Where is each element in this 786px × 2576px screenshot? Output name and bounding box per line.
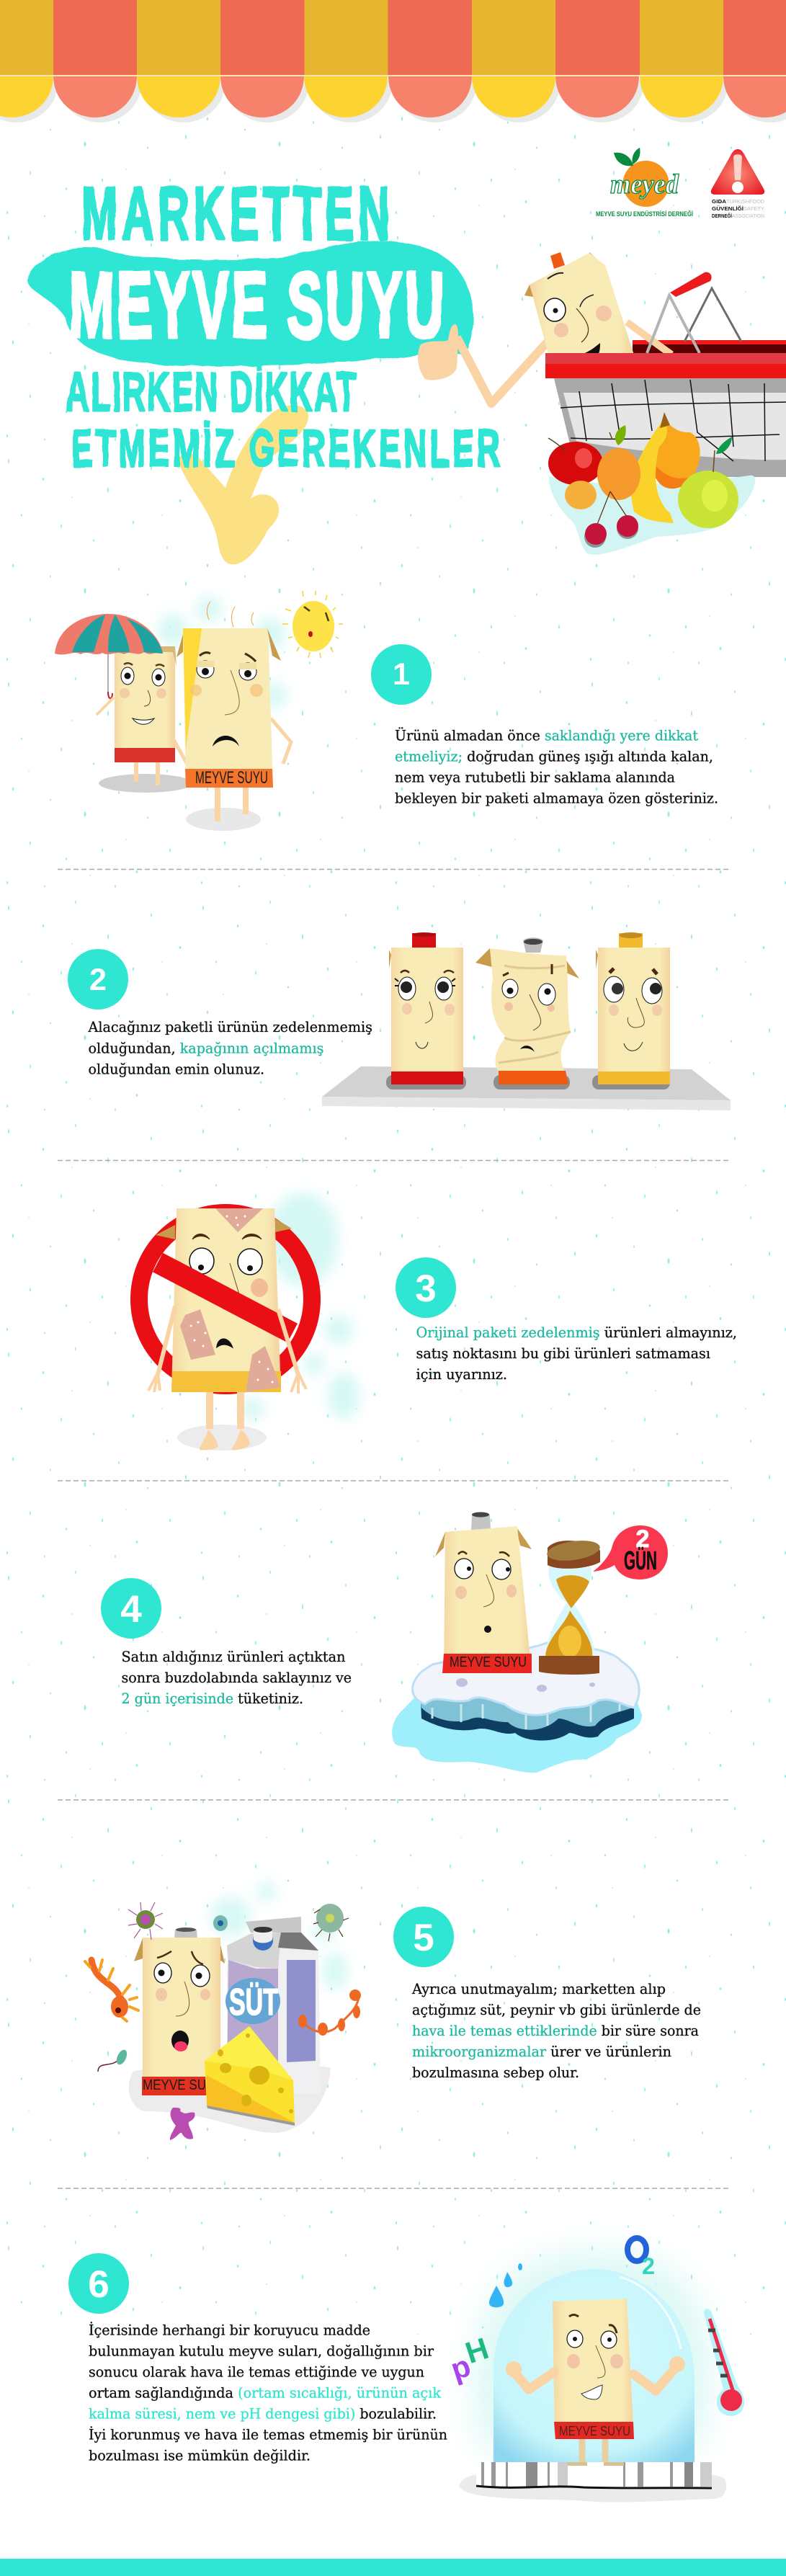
text block 6: İçerisinde herhangi bir koruyucu madde bbox=[89, 2322, 370, 2339]
illustration: damaged carton in prohibition sign bbox=[139, 1193, 359, 1450]
logo: meyed: meyed bbox=[610, 169, 679, 200]
prohibition ring bbox=[139, 1213, 312, 1386]
ice floe bbox=[412, 1643, 639, 1741]
text block 6 bbox=[89, 2322, 447, 2464]
text block 5: hava ile temas ettiklerinde bir süre sonra bbox=[412, 2022, 699, 2039]
number badge 2 bbox=[68, 949, 128, 1010]
logo: gıda güvenliği derneği: SAFETY bbox=[743, 205, 764, 212]
footer bar bbox=[0, 2559, 786, 2576]
icon: yellow check mark bbox=[178, 405, 308, 564]
text block 6: İyi korunmuş ve hava ile temas etmemiş bir ürünün bbox=[89, 2426, 447, 2443]
shelf bbox=[322, 1066, 731, 1110]
number badge 4: 4 bbox=[120, 1588, 142, 1631]
text block 2 bbox=[87, 1018, 372, 1078]
text block 4: sonra buzdolabında saklayınız ve bbox=[121, 1669, 352, 1686]
logo: gıda güvenliği derneği: DERNEĞİ bbox=[712, 213, 732, 219]
text block 1: nem veya rutubetli bir saklama alanında bbox=[395, 769, 675, 786]
awning bbox=[0, 0, 786, 122]
title: marketten: MARKETTEN bbox=[81, 172, 390, 256]
text block 6: sonucu olarak hava ile temas ettiğinde ve uygun bbox=[89, 2363, 424, 2381]
right carton bbox=[596, 932, 671, 1084]
flexing arms bbox=[506, 2356, 685, 2391]
number badge 5 bbox=[393, 1907, 454, 1967]
logo: meyed bbox=[596, 148, 693, 218]
text block 2: olduğundan emin olunuz. bbox=[88, 1061, 264, 1078]
speech bubble: 2 gün: 2 bbox=[636, 1525, 649, 1553]
puddle bbox=[392, 1693, 642, 1773]
text block 5 bbox=[411, 1980, 701, 2081]
text block 5: mikroorganizmalar ürer ve ürünlerin bbox=[412, 2043, 671, 2060]
logo: meyed: MEYVE SUYU ENDÜSTRİSİ DERNEĞİ bbox=[596, 210, 693, 218]
carton bbox=[435, 1512, 532, 1673]
carton: MEYVE SUYU bbox=[450, 1654, 527, 1670]
illustration: carton with thumb up and basket of fruit bbox=[418, 252, 786, 555]
text block 3: için uyarınız. bbox=[416, 1365, 507, 1383]
step 5 bbox=[85, 1881, 701, 2140]
step 2 bbox=[68, 932, 731, 1110]
text block 1: Ürünü almadan önce saklandığı yere dikkat bbox=[395, 726, 699, 744]
text block 1: etmeliyiz; doğrudan güneş ışığı altında kalan, bbox=[395, 748, 713, 765]
logo: gıda güvenliği derneği: GÜVENLİĞİ bbox=[712, 205, 743, 212]
text block 5: Ayrıca unutmayalım; marketten alıp bbox=[411, 1980, 666, 1997]
carton bbox=[553, 2299, 634, 2466]
ground shadow bbox=[129, 2063, 331, 2133]
crumpled middle carton bbox=[475, 937, 579, 1084]
text block 6: bulunmayan kutulu meyve suları, doğallığının bir bbox=[89, 2343, 434, 2360]
umbrella bbox=[55, 614, 163, 654]
fruit bbox=[548, 412, 755, 555]
illustration: three cartons on shelf bbox=[322, 932, 731, 1110]
illustration: cartons in sun and shade bbox=[55, 591, 343, 831]
title blob bbox=[27, 241, 473, 366]
icon: thermometer bbox=[704, 2309, 744, 2416]
text block 5: açtığımız süt, peynir vb gibi ürünlerde de bbox=[412, 2001, 701, 2018]
icon: water drops bbox=[489, 2263, 522, 2307]
icon: o2: 2 bbox=[642, 2253, 655, 2279]
text block 6: ortam sağlandığında (ortam sıcaklığı, ürünün açık bbox=[89, 2384, 442, 2402]
basket front bbox=[545, 272, 786, 477]
logo: gıda güvenliği derneği: TURKISHFOOD bbox=[726, 198, 765, 205]
arms and legs bbox=[148, 1306, 306, 1450]
text block 5: bozulmasına sebep olur. bbox=[412, 2064, 579, 2081]
carton arm and thumb bbox=[418, 324, 550, 404]
juice carton: MEYVE SU bbox=[143, 2077, 206, 2093]
icon: ph label bbox=[447, 2331, 493, 2386]
logo: gıda güvenliği derneği: ASSOCIATION bbox=[732, 213, 764, 219]
step 3 bbox=[139, 1193, 737, 1450]
number badge 1: 1 bbox=[393, 657, 410, 692]
number badge 3 bbox=[396, 1257, 456, 1318]
logo: gıda güvenliği derneği: GIDA bbox=[712, 198, 727, 205]
title bbox=[27, 172, 500, 478]
title: meyve suyu: MEYVE SUYU bbox=[69, 253, 444, 357]
number badge 1 bbox=[371, 644, 432, 705]
text block 3: Orijinal paketi zedelenmiş ürünleri almayınız, bbox=[416, 1324, 737, 1341]
dome base bbox=[476, 2462, 712, 2488]
icon: o2 bbox=[628, 2238, 655, 2279]
illustration: protected carton under glass dome bbox=[447, 2238, 744, 2503]
basket back and handles bbox=[633, 288, 786, 355]
text block 2: Alacağınız paketli ürünün zedelenmemiş bbox=[87, 1018, 372, 1035]
text block 3: satış noktasını bu gibi ürünleri satmaması bbox=[416, 1345, 710, 1362]
milk carton bbox=[225, 1917, 321, 2094]
step 1 bbox=[55, 591, 718, 831]
carton: MEYVE SUYU bbox=[559, 2424, 630, 2438]
title: etmemiz gerekenler: ETMEMİZ GEREKENLER bbox=[71, 419, 500, 478]
speech bubble: 2 gün: GÜN bbox=[624, 1546, 657, 1575]
icon: sun bbox=[282, 591, 343, 658]
illustration: cartons in sun and shade: MEYVE SUYU bbox=[195, 768, 268, 788]
number badge 6 bbox=[68, 2253, 129, 2314]
icon: ph label: H bbox=[461, 2331, 493, 2370]
cheese bbox=[205, 2026, 295, 2126]
speech bubble: 2 gün bbox=[593, 1525, 668, 1579]
title: alırken dikkat: ALIRKEN DİKKAT bbox=[66, 362, 356, 423]
illustration: juice carton, milk, cheese and microbes bbox=[85, 1881, 361, 2140]
step 6 bbox=[68, 2238, 744, 2503]
logo: gıda güvenliği derneği bbox=[711, 149, 765, 219]
number badge 3: 3 bbox=[415, 1267, 437, 1310]
text block 6: bozulması ise mümkün değildir. bbox=[89, 2446, 311, 2464]
text block 1 bbox=[395, 726, 718, 807]
text block 2: olduğundan, kapağının açılmamış bbox=[88, 1040, 324, 1057]
glass dome bbox=[494, 2269, 695, 2466]
winking carton bbox=[524, 252, 634, 357]
juice carton bbox=[134, 1927, 225, 2095]
milk carton: SÜT bbox=[229, 1982, 278, 2023]
carton body bbox=[156, 1208, 292, 1392]
icon: ph label: p bbox=[447, 2348, 475, 2386]
text block 4 bbox=[121, 1648, 352, 1707]
step 4 bbox=[101, 1512, 668, 1773]
text block 6: kalma süresi, nem ve pH dengesi gibi) bozulabilir. bbox=[89, 2405, 437, 2423]
prohibition bar bbox=[158, 1262, 292, 1333]
number badge 5: 5 bbox=[413, 1917, 434, 1959]
text block 1: bekleyen bir paketi almamaya özen gösteriniz. bbox=[395, 790, 718, 807]
left carton bbox=[389, 932, 465, 1084]
illustration: carton on ice with hourglass bbox=[392, 1512, 668, 1773]
microbes bbox=[85, 1902, 361, 2140]
text block 4: Satın aldığınız ürünleri açtıktan bbox=[121, 1648, 346, 1665]
text block 4: 2 gün içerisinde tüketiniz. bbox=[121, 1690, 303, 1707]
number badge 2: 2 bbox=[89, 963, 107, 997]
number badge 6: 6 bbox=[88, 2263, 110, 2306]
hourglass bbox=[539, 1538, 601, 1675]
text block 3 bbox=[416, 1324, 737, 1383]
number badge 4 bbox=[101, 1578, 161, 1639]
